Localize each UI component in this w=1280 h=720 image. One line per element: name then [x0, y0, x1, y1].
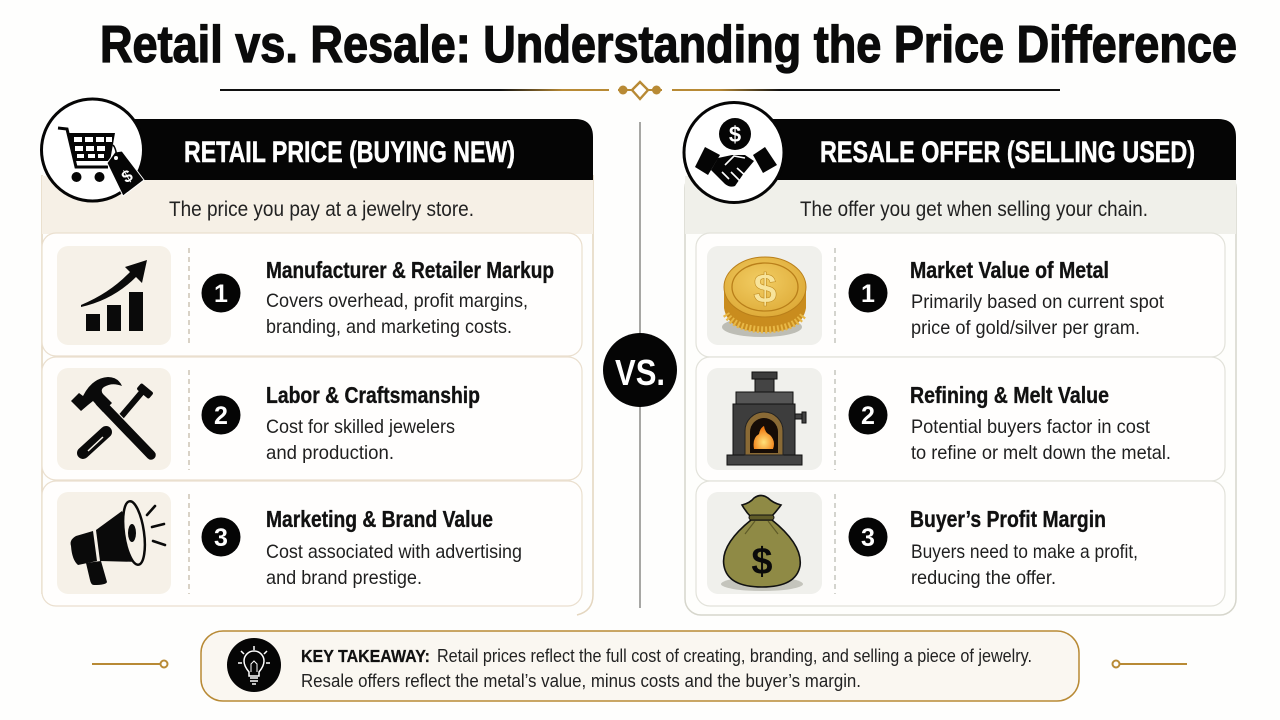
- number badge 1: [202, 274, 240, 312]
- icon: money bag: [721, 496, 803, 591]
- row 1: manufacturer and retailer markup: [42, 233, 582, 356]
- row 2: refining and melt value: Potential buyers factor in cost: [911, 416, 1151, 438]
- row 3: buyer's profit margin: Buyer’s Profit Margin: [910, 506, 1106, 532]
- center divider line: [639, 122, 641, 608]
- row 1: manufacturer and retailer markup: Covers overhead, profit margins,: [266, 290, 528, 312]
- row 3: buyer's profit margin: reducing the offer.: [911, 567, 1056, 589]
- number badge 1: [848, 274, 888, 312]
- subtitle band: [42, 176, 593, 234]
- number badge 2: [848, 396, 888, 434]
- icon: furnace with flame: [727, 372, 806, 465]
- row 1: manufacturer and retailer markup: branding, and marketing costs.: [266, 316, 512, 338]
- header bar: [770, 119, 1236, 180]
- row 3: marketing and brand value: Marketing & Brand Value: [266, 506, 493, 532]
- row 2: refining and melt value: Refining & Melt Value: [910, 382, 1109, 408]
- callout: key takeaway: Resale offers reflect the metal’s value, minus costs and the buyer’s margin.: [301, 671, 861, 691]
- panel: resale offer: [684, 102, 1236, 615]
- row 3: buyer's profit margin: Buyers need to make a profit,: [911, 541, 1138, 563]
- title ornament divider: [220, 82, 1060, 99]
- callout: key takeaway: [201, 631, 1079, 701]
- row 2: labor and craftsmanship: and production.: [266, 442, 394, 464]
- number badge 2: [202, 396, 240, 434]
- row 3: marketing and brand value: and brand prestige.: [266, 567, 422, 589]
- subtitle band: The price you pay at a jewelry store.: [169, 198, 474, 221]
- key takeaway left connector: [92, 660, 168, 668]
- row 3: buyer's profit margin: [696, 481, 1225, 606]
- number badge 3: 3: [861, 524, 875, 552]
- number badge 1: 1: [861, 280, 875, 308]
- icon: handshake with dollar coin: [684, 102, 784, 202]
- row 2: labor and craftsmanship: Cost for skilled jewelers: [266, 416, 455, 438]
- number badge 2: 2: [861, 402, 875, 430]
- row 3: marketing and brand value: [42, 481, 582, 606]
- row 1: market value of metal: price of gold/silver per gram.: [911, 317, 1140, 339]
- icon: gold dollar coin: [722, 257, 806, 337]
- row 2: refining and melt value: to refine or melt down the metal.: [911, 442, 1171, 464]
- icon: money bag: $: [751, 541, 773, 583]
- panel background: [685, 172, 1236, 615]
- number badge 3: [202, 518, 240, 556]
- VS badge: [603, 333, 677, 407]
- row 2: labor and craftsmanship: [42, 357, 582, 480]
- callout: key takeaway: KEY TAKEAWAY:: [301, 646, 430, 666]
- icon: handshake with dollar coin: $: [729, 122, 741, 147]
- callout: key takeaway: Retail prices reflect the full cost of creating, branding, and selling a piece of jewelry.: [437, 646, 1032, 666]
- icon: megaphone: [71, 500, 165, 585]
- row 1: market value of metal: [696, 233, 1225, 357]
- panel: retail price: [42, 99, 593, 615]
- row 3: marketing and brand value: Cost associated with advertising: [266, 541, 522, 563]
- row 1: manufacturer and retailer markup: Manufacturer & Retailer Markup: [266, 257, 554, 283]
- number badge 2: 2: [214, 402, 228, 430]
- header bar: RETAIL PRICE (BUYING NEW): [184, 136, 515, 169]
- VS badge: VS.: [615, 352, 665, 393]
- number badge 3: 3: [214, 524, 228, 552]
- subtitle band: [685, 176, 1236, 234]
- icon: shopping cart with price tag: $: [118, 166, 137, 187]
- row 1: market value of metal: Primarily based on current spot: [911, 291, 1165, 313]
- key takeaway right connector: [1112, 660, 1187, 668]
- icon: light bulb: [227, 638, 281, 692]
- icon: crossed hammer and screwdriver: [71, 377, 154, 455]
- number badge 3: [848, 518, 888, 556]
- row 2: refining and melt value: [696, 357, 1225, 481]
- panel background: [42, 175, 593, 615]
- row 1: market value of metal: Market Value of Metal: [910, 257, 1109, 283]
- icon: rising bar chart with arrow: [81, 260, 147, 331]
- icon: shopping cart with price tag: [42, 99, 144, 201]
- subtitle band: The offer you get when selling your chain.: [800, 198, 1148, 221]
- header bar: [125, 119, 593, 180]
- icon: gold dollar coin: $: [753, 265, 777, 312]
- number badge 1: 1: [214, 280, 228, 308]
- row 2: labor and craftsmanship: Labor & Craftsmanship: [266, 382, 480, 408]
